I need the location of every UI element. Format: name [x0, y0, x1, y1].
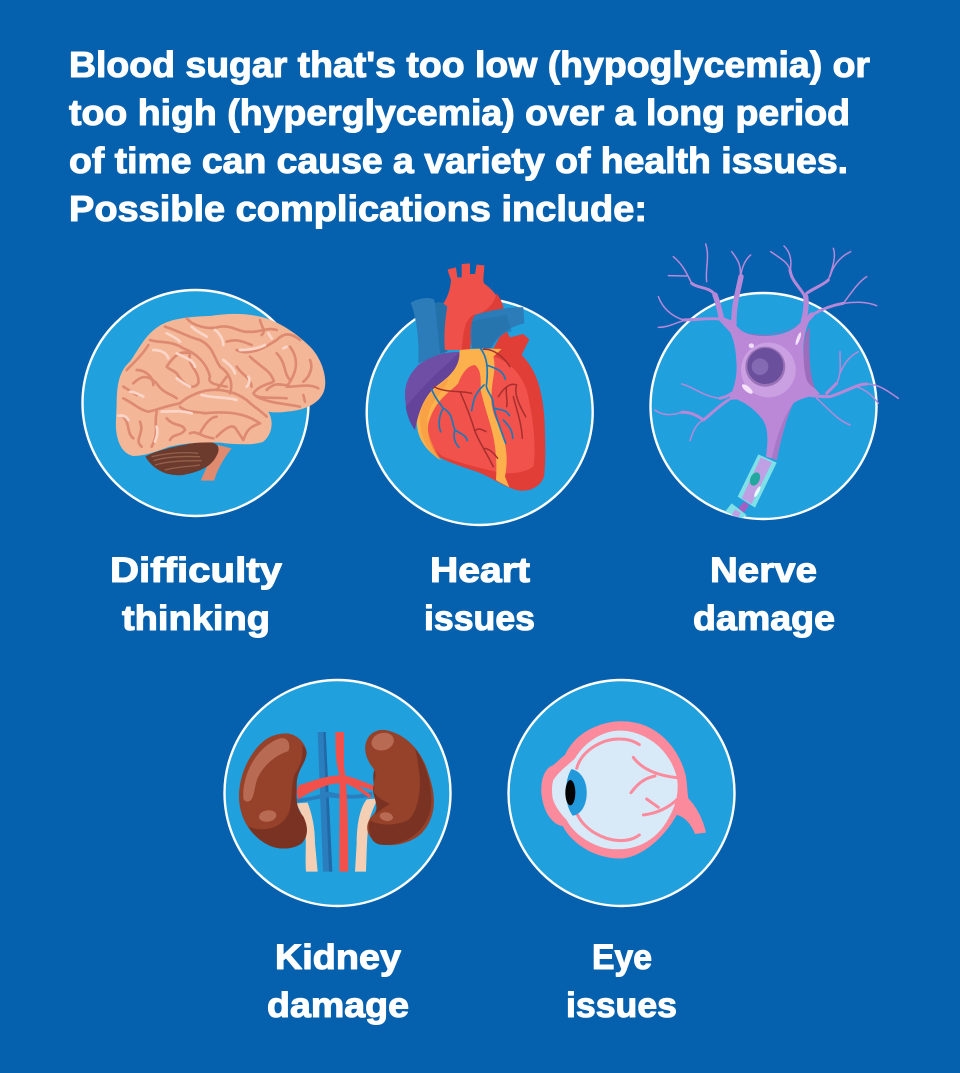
panel: difficulty thinking [82, 290, 325, 516]
icon: neuron [655, 244, 898, 518]
icon: brain [116, 314, 325, 481]
title: of time can cause a variety of health issues. [69, 140, 848, 181]
title: Blood sugar that's too low (hypoglycemia) or [69, 44, 870, 85]
icon: kidney circle [224, 680, 450, 906]
title: too high (hyperglycemia) over a long period [69, 92, 850, 133]
icon: heart circle [367, 299, 593, 525]
label: heart issues [424, 551, 535, 638]
label: heart issues: Heart [430, 551, 530, 590]
panel: heart issues [367, 263, 593, 525]
panel: nerve damage [650, 244, 898, 519]
label: difficulty thinking: thinking [122, 599, 270, 638]
label: nerve damage: damage [693, 599, 835, 638]
icon: eye [541, 721, 706, 858]
icon: nerve circle [650, 293, 876, 519]
label: eye issues: issues [566, 986, 677, 1025]
panel: kidney damage [224, 680, 450, 906]
label: eye issues: Eye [592, 938, 652, 977]
label: nerve damage [693, 551, 835, 638]
icon: heart [405, 263, 545, 491]
icon: brain circle [82, 290, 308, 516]
label: difficulty thinking [110, 551, 283, 638]
title [69, 44, 870, 229]
icon: eye circle [508, 680, 734, 906]
label: kidney damage: Kidney [275, 938, 402, 977]
label: difficulty thinking: Difficulty [110, 551, 283, 590]
icon: kidneys [239, 730, 434, 872]
title: Possible complications include: [69, 188, 647, 229]
label: eye issues [566, 938, 677, 1025]
label: kidney damage [267, 938, 409, 1025]
label: heart issues: issues [424, 599, 535, 638]
panel: eye issues [508, 680, 734, 906]
label: kidney damage: damage [267, 986, 409, 1025]
label: nerve damage: Nerve [710, 551, 817, 590]
